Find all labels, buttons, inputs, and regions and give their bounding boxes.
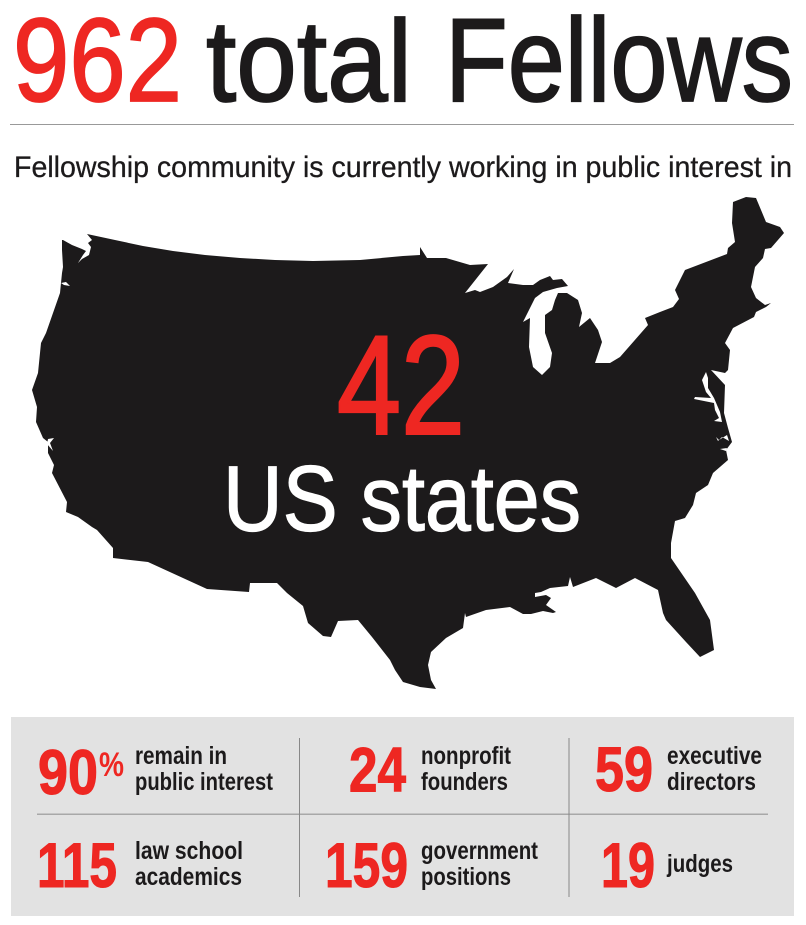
title bbox=[13, 0, 793, 127]
stat: 59 executive directors: executive bbox=[667, 742, 762, 770]
stat: 24 nonprofit founders: 24 bbox=[349, 736, 406, 806]
US states: US states bbox=[223, 446, 581, 550]
stat: 159 government positions: positions bbox=[421, 863, 511, 891]
stat: 24 nonprofit founders: nonprofit bbox=[421, 742, 512, 770]
stat: 19 judges: 19 bbox=[601, 831, 655, 901]
panel: statistics bbox=[11, 717, 794, 916]
stat: 59 executive directors bbox=[595, 735, 762, 805]
42: 42 bbox=[337, 306, 465, 464]
stat: 115 law school academics: 115 bbox=[37, 831, 117, 901]
San Francisco Bay bbox=[47, 438, 54, 451]
Columbia River bbox=[61, 282, 70, 286]
stat: 90% remain in public interest: remain in bbox=[135, 742, 227, 770]
Chesapeake Bay bbox=[694, 372, 722, 422]
stat: 19 judges: judges bbox=[666, 850, 733, 878]
stat: 115 law school academics bbox=[37, 831, 243, 901]
map of the United States bbox=[32, 197, 784, 689]
stat: 115 law school academics: law school bbox=[135, 837, 243, 865]
stat: 90% remain in public interest: 90 bbox=[38, 738, 98, 808]
stat: 59 executive directors: directors bbox=[667, 768, 756, 796]
stat: 19 judges bbox=[601, 831, 733, 901]
Pamlico Sound bbox=[716, 435, 729, 451]
stat: 159 government positions bbox=[325, 831, 539, 901]
stat: 59 executive directors: 59 bbox=[595, 735, 653, 805]
stat: 159 government positions: government bbox=[421, 837, 539, 865]
stat: 159 government positions: 159 bbox=[325, 831, 408, 901]
stat: 24 nonprofit founders: founders bbox=[421, 768, 508, 796]
stat: 90% remain in public interest bbox=[38, 738, 274, 808]
stat: 90% remain in public interest: % bbox=[99, 746, 124, 784]
stat: 90% remain in public interest: public interest bbox=[135, 768, 274, 796]
stat: 24 nonprofit founders bbox=[349, 736, 512, 806]
stat: 115 law school academics: academics bbox=[135, 863, 242, 891]
